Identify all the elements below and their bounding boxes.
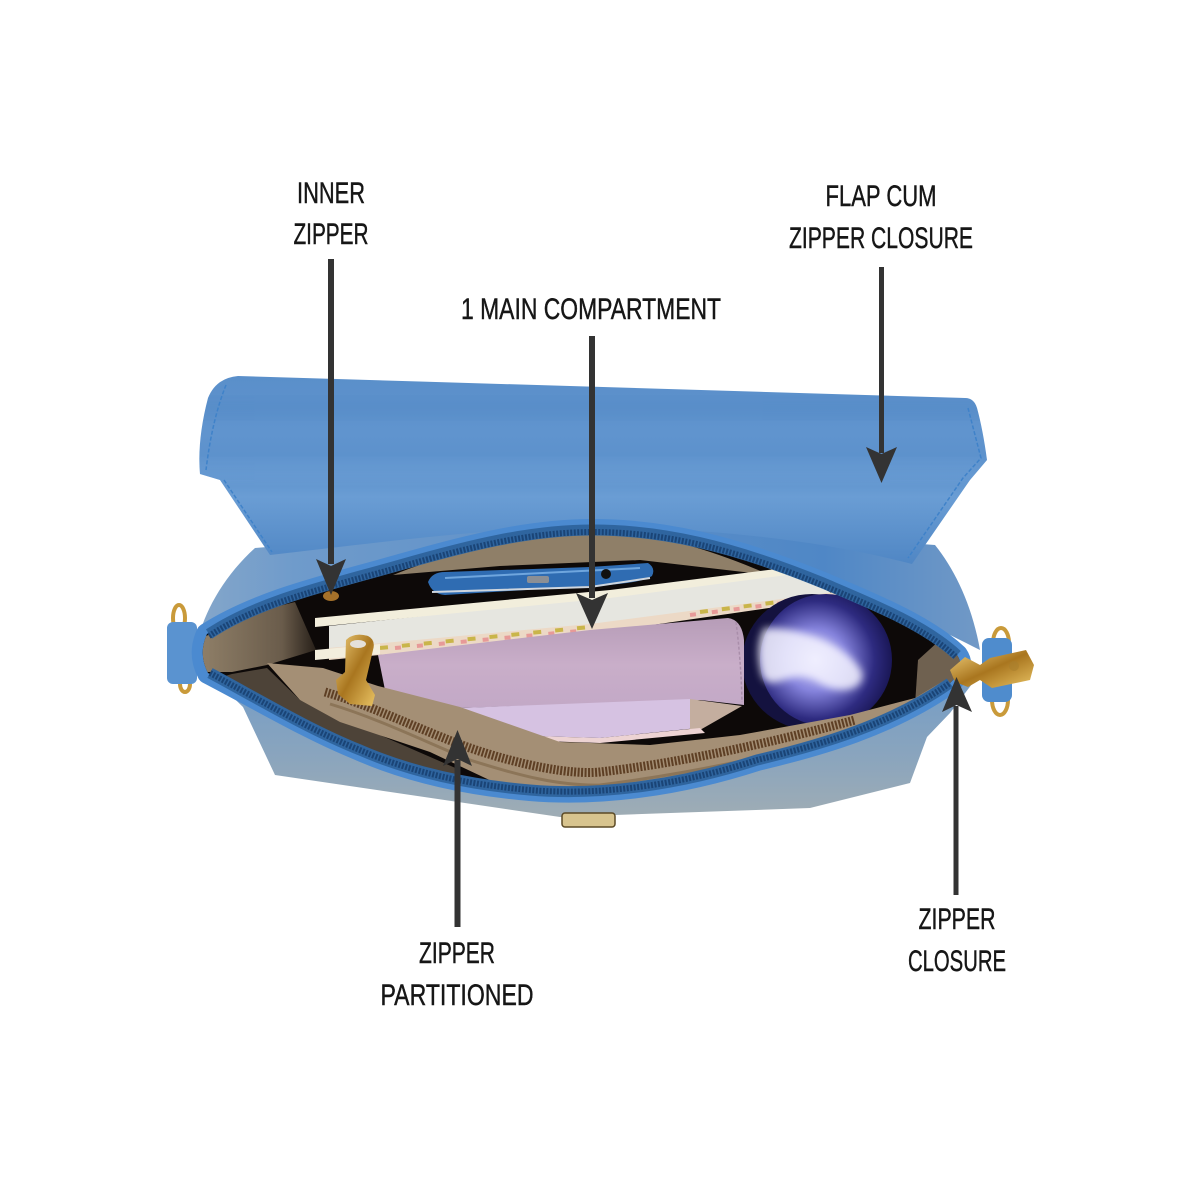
arrow: zipper partitioned	[443, 730, 472, 927]
gold outer zipper pull	[950, 650, 1034, 688]
arrow: main compartment	[576, 336, 608, 629]
left lining	[198, 602, 316, 672]
right lining	[916, 644, 960, 698]
label: zipper partitioned: PARTITIONED	[380, 979, 534, 1012]
lower zipper tape	[210, 673, 950, 792]
partition zipper	[325, 692, 855, 773]
label: inner zipper: INNER	[297, 177, 365, 210]
label: zipper partitioned: ZIPPER	[419, 937, 495, 970]
gold pin	[323, 591, 339, 601]
bag photo illustration	[167, 376, 1034, 827]
label: inner zipper: ZIPPER	[294, 218, 368, 251]
label: flap cum zipper closure: FLAP CUM	[826, 180, 936, 213]
opening interior	[202, 536, 960, 786]
arrow: zipper closure	[942, 677, 972, 895]
flap	[190, 376, 990, 564]
right strap loop	[982, 628, 1012, 715]
light blue trim	[203, 530, 960, 792]
lilac wallet	[378, 618, 744, 743]
label: zipper closure: CLOSURE	[908, 945, 1006, 978]
gold clasp	[562, 813, 615, 827]
phone	[428, 563, 653, 595]
upper bag body	[198, 520, 980, 650]
pocket lining under partition	[226, 668, 454, 774]
label: zipper closure: ZIPPER	[918, 903, 996, 936]
upper zipper tape	[209, 530, 957, 657]
left strap loop	[167, 605, 197, 692]
top lining	[393, 536, 760, 575]
zipper partition lining	[267, 663, 942, 786]
notebook	[315, 566, 838, 660]
arrow: inner zipper	[316, 259, 346, 595]
label: flap cum zipper closure: ZIPPER CLOSURE	[789, 222, 973, 255]
lower bag body	[205, 670, 975, 817]
arrow: flap	[866, 267, 897, 483]
jar lid	[742, 594, 892, 730]
label: main compartment: 1 MAIN COMPARTMENT	[461, 293, 721, 326]
gold inner zipper pull	[336, 635, 375, 706]
